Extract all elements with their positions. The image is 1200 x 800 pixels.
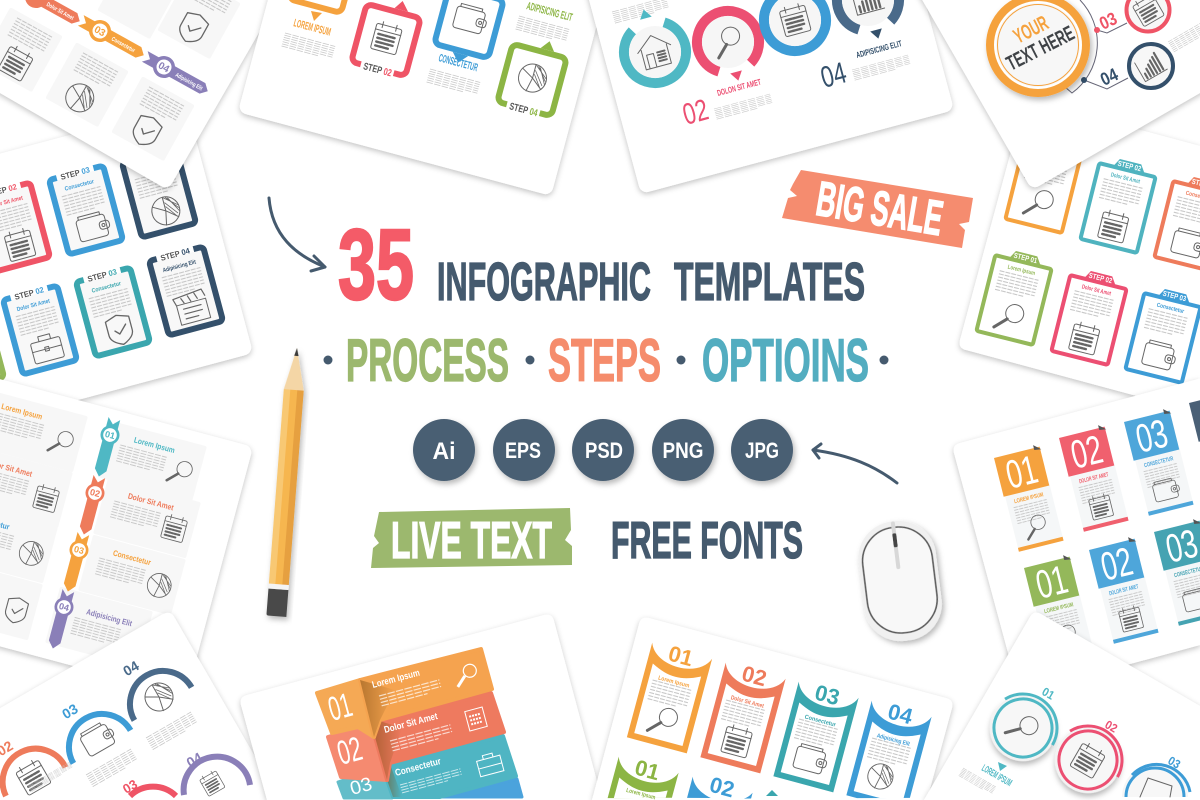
panel: your text here sheet, top right bbox=[903, 0, 1200, 190]
panel: step cards sheet, left: STEP 04 bbox=[160, 246, 191, 263]
panel: scalloped frames sheet, bottom centre right: Dolor Sit Amet bbox=[730, 695, 764, 710]
panel: vertical ribbon sheet, left: Consectetur bbox=[112, 549, 152, 567]
panel: square step frames sheet, top: CONSECTETUR bbox=[437, 52, 479, 74]
panel: scalloped frames sheet, bottom centre right: 01 bbox=[632, 755, 662, 785]
panel: square step frames sheet, top: ADIPISICING ELIT bbox=[525, 0, 574, 24]
panel: scalloped frames sheet, bottom centre right: 03 bbox=[812, 680, 842, 710]
heading: process steps options: PROCESS bbox=[346, 327, 509, 394]
panel: vertical ribbon sheet, left: 01 bbox=[104, 429, 116, 441]
banner: big sale bbox=[782, 170, 973, 248]
panel: numbered tiles sheet, right: 02 bbox=[1097, 540, 1137, 590]
panel: clipboard steps sheet, right: Dolor Sit Amet bbox=[1081, 284, 1112, 297]
panel: clipboard steps sheet, right: STEP 02 bbox=[1117, 159, 1142, 173]
panel: numbered tiles sheet, right: 03 bbox=[1132, 412, 1172, 462]
format badges: Ai bbox=[432, 438, 456, 465]
panel: step cards sheet, left: Consectetur bbox=[64, 179, 95, 193]
heading: infographic templates: INFOGRAPHIC bbox=[437, 252, 651, 312]
panel: ribbon steps sheet, top left bbox=[0, 0, 297, 190]
panel: circle steps sheet, top centre: DOLON SIT AMET bbox=[716, 76, 762, 98]
panel: numbered tiles sheet, right: 01 bbox=[1032, 558, 1072, 608]
panel: circle steps sheet, top centre: ADIPISICING ELIT bbox=[855, 38, 903, 60]
panel: vertical ribbon sheet, left: 03 bbox=[73, 544, 85, 556]
panel: stacked banners sheet, bottom centre: 02 bbox=[333, 730, 366, 773]
panel: step cards sheet, left: Dolor Sit Amet bbox=[16, 299, 51, 313]
heading: process steps options bbox=[324, 327, 888, 394]
panel: stacked banners sheet, bottom centre: 01 bbox=[324, 686, 356, 729]
panel: stacked banners sheet, bottom centre bbox=[241, 615, 602, 800]
arrow: curved to the badges bbox=[813, 444, 897, 483]
panel: step cards sheet, left: STEP 03 bbox=[87, 267, 118, 284]
panel: vertical ribbon sheet, left: Lorem Ipsum bbox=[133, 436, 176, 455]
panel: square step frames sheet, top: STEP 02 bbox=[362, 61, 393, 79]
panel: vertical ribbon sheet, left: 02 bbox=[89, 487, 101, 499]
panel: arc steps sheet, bottom left: 03 bbox=[59, 700, 81, 722]
panel: stacked banners sheet, bottom centre: Consectetur bbox=[394, 756, 442, 779]
panel: stacked banners sheet, bottom centre: Dolor Sit Amet bbox=[383, 711, 440, 736]
format badges: PSD bbox=[585, 438, 623, 463]
panel: ribbon steps sheet, top left: Adipisicing Elit bbox=[174, 72, 203, 92]
panel: your text here sheet, top right: YOUR bbox=[1010, 12, 1052, 48]
panel: ribbon steps sheet, top left: Consectetur bbox=[110, 36, 136, 55]
panel: ringed circles sheet, bottom right: 01 bbox=[1040, 684, 1057, 703]
panel: numbered tiles sheet, right bbox=[954, 378, 1200, 692]
panel: numbered tiles sheet, right: 01 bbox=[1002, 448, 1042, 498]
panel: ribbon steps sheet, top left: 03 bbox=[92, 24, 107, 40]
panel: stacked banners sheet, bottom centre: Lorem Ipsum bbox=[371, 668, 421, 691]
panel: clipboard steps sheet, right bbox=[960, 101, 1200, 413]
panel: your text here sheet, top right: 04 bbox=[1097, 64, 1121, 90]
arrow: curved to the headline bbox=[269, 198, 325, 271]
panel: scalloped frames sheet, bottom centre right: Adipisicing Elit bbox=[876, 733, 910, 748]
panel: arc steps sheet, bottom left: 03 bbox=[120, 776, 140, 797]
heading: process steps options: STEPS bbox=[548, 327, 661, 394]
panel: numbered tiles sheet, right: DOLOR SIT AMET bbox=[1109, 584, 1139, 597]
panel: scalloped frames sheet, bottom centre right: 02 bbox=[739, 661, 769, 691]
panel: stacked banners sheet, bottom centre: 03 bbox=[348, 774, 375, 800]
panel: numbered tiles sheet, right: 02 bbox=[1067, 428, 1107, 478]
heading: infographic templates: TEMPLATES bbox=[674, 252, 865, 312]
panel: clipboard steps sheet, right: Lorem Ipsum bbox=[1007, 265, 1036, 277]
panel: ribbon steps sheet, top left: 04 bbox=[156, 60, 171, 76]
format badges: PNG bbox=[662, 438, 704, 463]
panel: clipboard steps sheet, right: Dolor Sit Amet bbox=[1110, 172, 1141, 185]
panel: numbered tiles sheet, right: LOREM IPSUM bbox=[1014, 492, 1044, 505]
panel: numbered tiles sheet, right: CONSECTETUR bbox=[1144, 456, 1175, 469]
panel: clipboard steps sheet, right: STEP 02 bbox=[1088, 271, 1113, 285]
panel: your text here sheet, top right: TEXT HERE bbox=[1003, 22, 1078, 75]
panel: ringed circles sheet, bottom right: 03 bbox=[1166, 753, 1183, 772]
panel: step cards sheet, left bbox=[0, 104, 253, 437]
banner: live text: LIVE TEXT bbox=[391, 512, 552, 570]
panel: circle steps sheet, top centre: 02 bbox=[679, 93, 712, 132]
pencil bbox=[266, 347, 307, 617]
panel: scalloped frames sheet, bottom centre right: Consectetur bbox=[804, 715, 837, 729]
panel: ringed circles sheet, bottom right bbox=[924, 613, 1200, 800]
panel: vertical ribbon sheet, left: Lorem Ipsum bbox=[0, 402, 43, 421]
heading: process steps options: OPTIOINS bbox=[702, 327, 869, 394]
panel: arc steps sheet, bottom left bbox=[0, 613, 280, 800]
panel: scalloped frames sheet, bottom centre right bbox=[592, 618, 952, 800]
panel: arc steps sheet, bottom left: 04 bbox=[184, 749, 205, 771]
banner: big sale: BIG SALE bbox=[813, 172, 947, 246]
panel: vertical ribbon sheet, left: Dolor Sit Amet bbox=[127, 492, 175, 512]
panel: vertical ribbon sheet, left bbox=[0, 363, 253, 696]
panel: vertical ribbon sheet, left: 04 bbox=[58, 601, 70, 613]
panel: your text here sheet, top right: 03 bbox=[1096, 8, 1120, 34]
panel: ribbon steps sheet, top left: Dolor Sit Amet bbox=[45, 2, 74, 22]
panel: clipboard steps sheet, right: Consectetur bbox=[1156, 303, 1185, 315]
panel: vertical ribbon sheet, left: Adipisicing Elit bbox=[85, 607, 133, 628]
heading: free fonts: FREE FONTS bbox=[611, 512, 803, 570]
panel: scalloped frames sheet, bottom centre right: 01 bbox=[666, 641, 696, 671]
banner: live text bbox=[371, 508, 572, 570]
heading: number 35: 35 bbox=[338, 209, 414, 321]
format badges: JPG bbox=[745, 438, 779, 463]
format badges: EPS bbox=[505, 438, 541, 463]
format badges bbox=[413, 419, 793, 481]
panel: ringed circles sheet, bottom right: 02 bbox=[1102, 717, 1120, 736]
panel: clipboard steps sheet, right: STEP 03 bbox=[1162, 289, 1187, 303]
panel: numbered tiles sheet, right: LOREM IPSUM bbox=[1044, 602, 1074, 615]
panel: square step frames sheet, top bbox=[238, 0, 618, 196]
panel: clipboard steps sheet, right: STEP 01 bbox=[1013, 251, 1038, 265]
panel: step cards sheet, left: Adipisicing Elit bbox=[162, 260, 197, 274]
panel: numbered tiles sheet, right: DOLOR SIT AMET bbox=[1079, 472, 1109, 485]
panel: scalloped frames sheet, bottom centre right: 04 bbox=[885, 699, 916, 729]
icon: computer mouse bbox=[854, 517, 946, 645]
panel: circle steps sheet, top centre bbox=[574, 0, 954, 194]
panel: square step frames sheet, top: LOREM IPSUM bbox=[292, 17, 332, 39]
panel: step cards sheet, left: Consectetur bbox=[91, 281, 122, 295]
panel: circle steps sheet, top centre: 04 bbox=[817, 56, 850, 95]
panel: step cards sheet, left: STEP 03 bbox=[60, 165, 91, 182]
panel: arc steps sheet, bottom left: 04 bbox=[120, 657, 142, 679]
panel: scalloped frames sheet, bottom centre right: Lorem Ipsum bbox=[657, 676, 690, 690]
panel: square step frames sheet, top: STEP 04 bbox=[508, 101, 539, 119]
panel: step cards sheet, left: STEP 02 bbox=[14, 285, 45, 302]
